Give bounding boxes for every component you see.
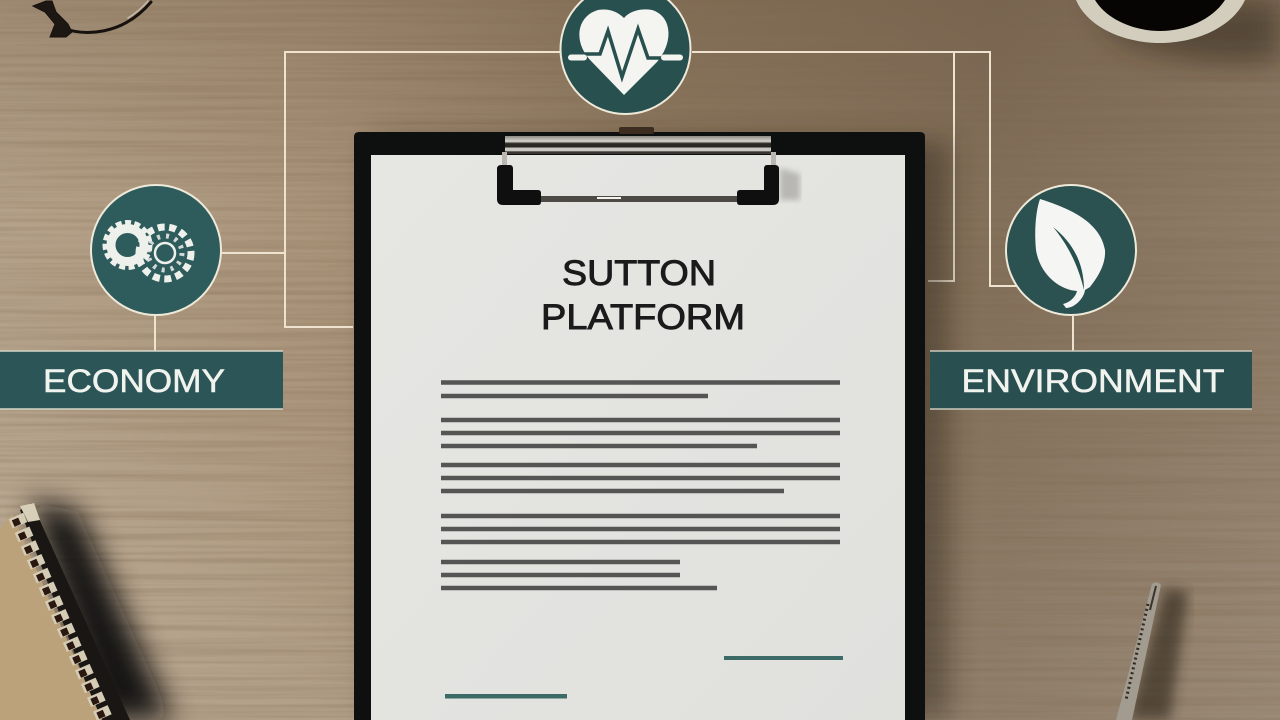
signature line left	[445, 694, 567, 698]
eyeglasses	[33, 1, 151, 37]
title: PLATFORM	[541, 298, 745, 337]
metal clip	[497, 127, 800, 205]
environment circle	[1006, 185, 1136, 315]
panel: health node	[560, 0, 690, 114]
coffee cup	[1076, 0, 1280, 62]
banner: economy	[0, 351, 283, 409]
paper sheet	[371, 155, 905, 720]
economy circle	[91, 185, 221, 315]
banner: environment	[930, 351, 1252, 409]
signature line right	[724, 656, 843, 660]
connector lines	[155, 52, 1073, 351]
panel: environment node	[1006, 185, 1136, 315]
title	[541, 254, 745, 337]
health circle	[560, 0, 690, 114]
clipboard board	[354, 132, 925, 720]
banner label: economy: ECONOMY	[43, 363, 225, 399]
panel: economy node	[91, 185, 221, 315]
icon: heart with pulse	[571, 9, 680, 95]
document text lines	[441, 382, 840, 588]
icon: gears	[105, 222, 191, 279]
pen	[1116, 582, 1188, 720]
icon: leaf	[1035, 199, 1105, 308]
clipboard	[354, 127, 950, 720]
banner label: environment: ENVIRONMENT	[962, 363, 1224, 399]
notebook spiral binding	[15, 503, 105, 719]
notebook	[0, 500, 172, 720]
title: SUTTON	[562, 254, 716, 293]
